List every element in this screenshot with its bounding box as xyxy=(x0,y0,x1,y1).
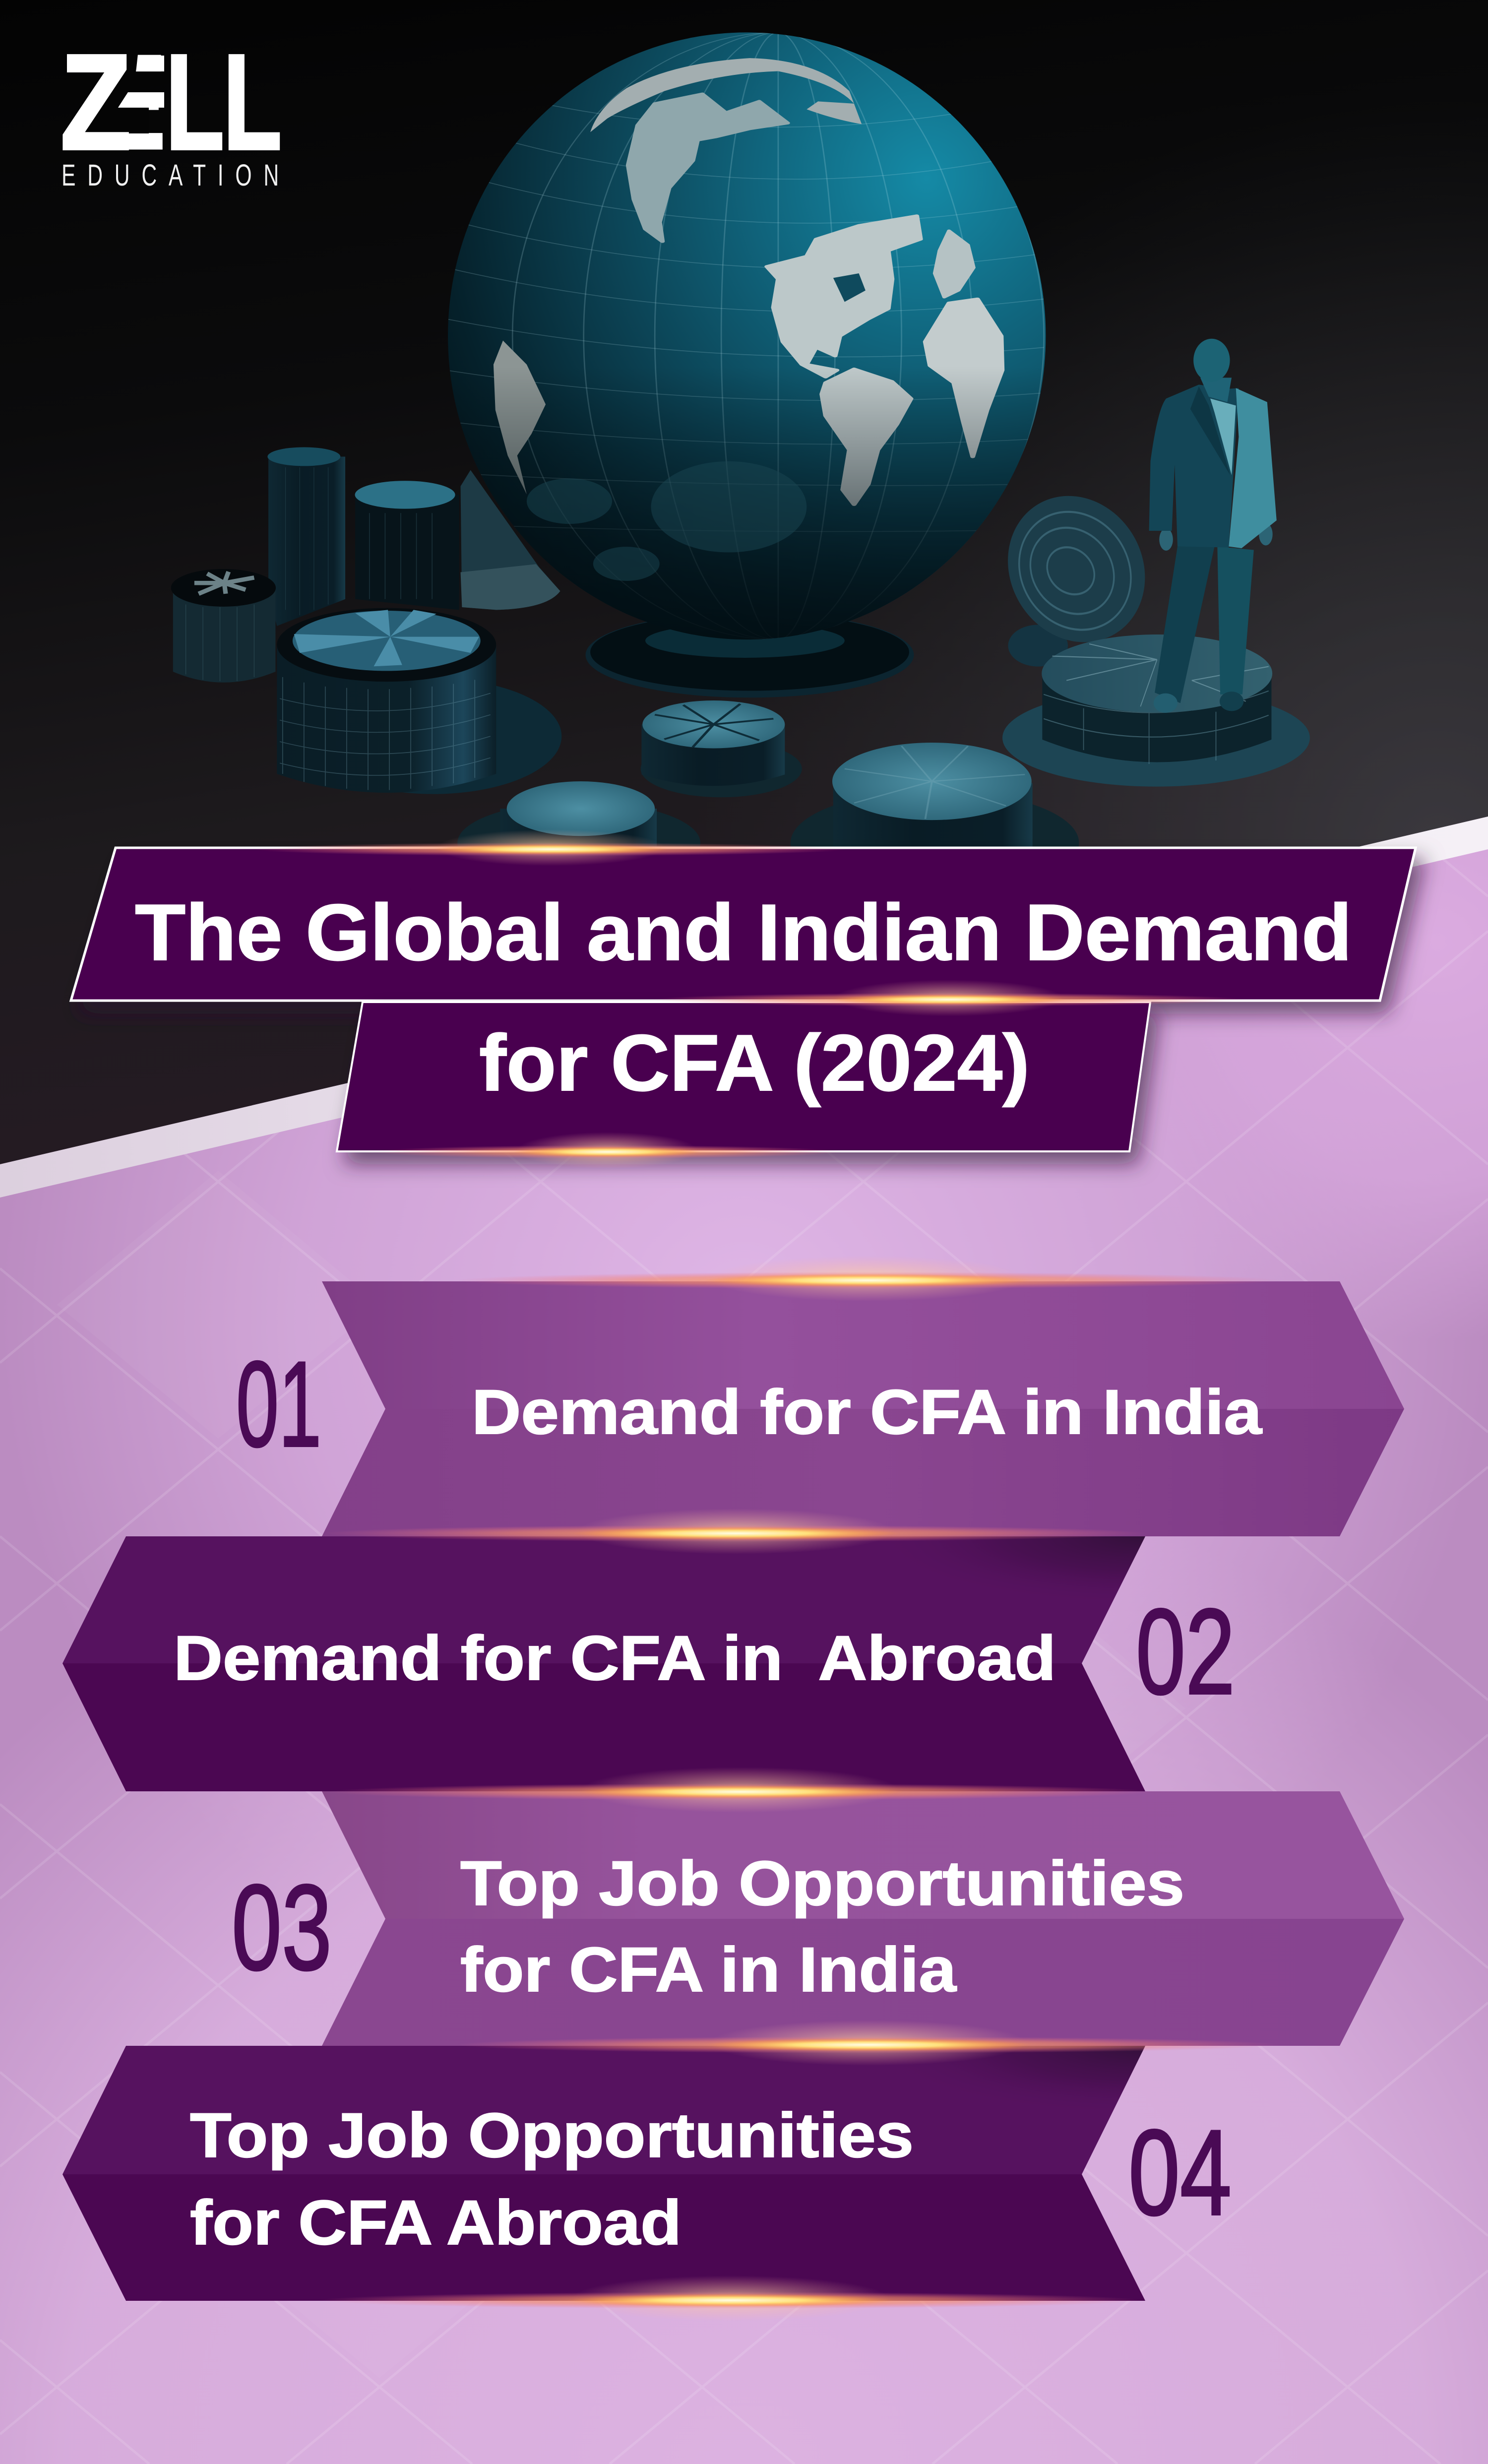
man pedestal xyxy=(1002,634,1310,787)
large cylinder with base plate xyxy=(277,608,561,794)
legs xyxy=(1155,547,1215,703)
continent: arctic cap xyxy=(590,58,862,132)
continent: africa xyxy=(925,299,1002,457)
title line 1: The Global and Indian Demand xyxy=(135,888,1352,977)
title banner xyxy=(71,848,1416,1151)
lower center disc xyxy=(791,743,1079,895)
chevron 04 xyxy=(62,2046,1145,2301)
continent: left edge land xyxy=(494,341,546,494)
lilac background with diamond lattice xyxy=(0,794,1488,2464)
item 03 label: Top Job Opportunities xyxy=(460,1848,1184,1918)
continent: hanging land mass xyxy=(628,94,788,242)
continent: south america xyxy=(822,369,911,505)
chevron 03 xyxy=(322,1791,1404,2046)
jacket dark side xyxy=(1149,384,1239,548)
logo wordmark ZELL: Z xyxy=(61,26,131,178)
chevron 01 xyxy=(322,1281,1404,1536)
logo: Zell Education xyxy=(61,26,282,192)
title line 1 panel xyxy=(71,848,1416,1001)
hands xyxy=(1159,528,1173,551)
figure of a man in a suit xyxy=(1149,339,1277,713)
globe xyxy=(446,32,1046,639)
center short cylinder xyxy=(640,700,802,797)
funnel object behind globe xyxy=(461,470,560,610)
item 04 label: Top Job Opportunities xyxy=(190,2100,914,2170)
reflected coins in the sphere xyxy=(527,461,806,581)
dark photo panel: globe and figures xyxy=(0,0,1488,1191)
logo wordmark ZELL xyxy=(61,26,282,178)
logo wordmark ZELL: E xyxy=(113,26,165,178)
shirt xyxy=(1210,398,1236,475)
title line 2: for CFA (2024) xyxy=(479,1018,1030,1108)
item 04 number: 04 xyxy=(1128,2104,1232,2240)
title line 2 panel xyxy=(337,1002,1150,1151)
logo wordmark ZELL: L xyxy=(223,26,282,178)
tilted ribbed disc xyxy=(991,473,1162,665)
sphere lower shading xyxy=(448,32,1046,639)
lapel xyxy=(1190,386,1230,475)
shoes xyxy=(1154,694,1178,713)
globe stand xyxy=(585,621,914,697)
item 03 label: for CFA in India xyxy=(460,1934,957,2005)
lower left disc xyxy=(457,781,700,884)
back disc plate xyxy=(1008,625,1068,667)
chevron 02 xyxy=(62,1536,1145,1791)
item 01 label: Demand for CFA in India xyxy=(472,1377,1262,1447)
right object group xyxy=(991,339,1310,787)
logo tagline: EDUCATION xyxy=(62,159,279,192)
small cylinder xyxy=(171,569,276,683)
jacket light side xyxy=(1229,388,1277,548)
head and neck xyxy=(1200,378,1232,402)
item 02 number: 02 xyxy=(1136,1583,1235,1719)
item 03 number: 03 xyxy=(232,1859,332,1995)
item 03 label xyxy=(460,1848,1184,2005)
item 04 label xyxy=(190,2100,914,2258)
lake detail xyxy=(833,273,866,302)
item 01 number: 01 xyxy=(236,1336,321,1472)
lens flares on banner edges xyxy=(254,829,1280,2321)
item 04 label: for CFA Abroad xyxy=(190,2187,682,2258)
continent: north america xyxy=(767,216,921,377)
white diagonal stripe xyxy=(0,817,1488,1198)
logo wordmark ZELL: L xyxy=(166,26,224,178)
medium cylinder xyxy=(355,481,459,610)
tall cylinder xyxy=(267,447,345,626)
left object group xyxy=(171,447,561,794)
continent: europe xyxy=(935,231,974,297)
item 02 label: Demand for CFA in Abroad xyxy=(174,1623,1056,1693)
